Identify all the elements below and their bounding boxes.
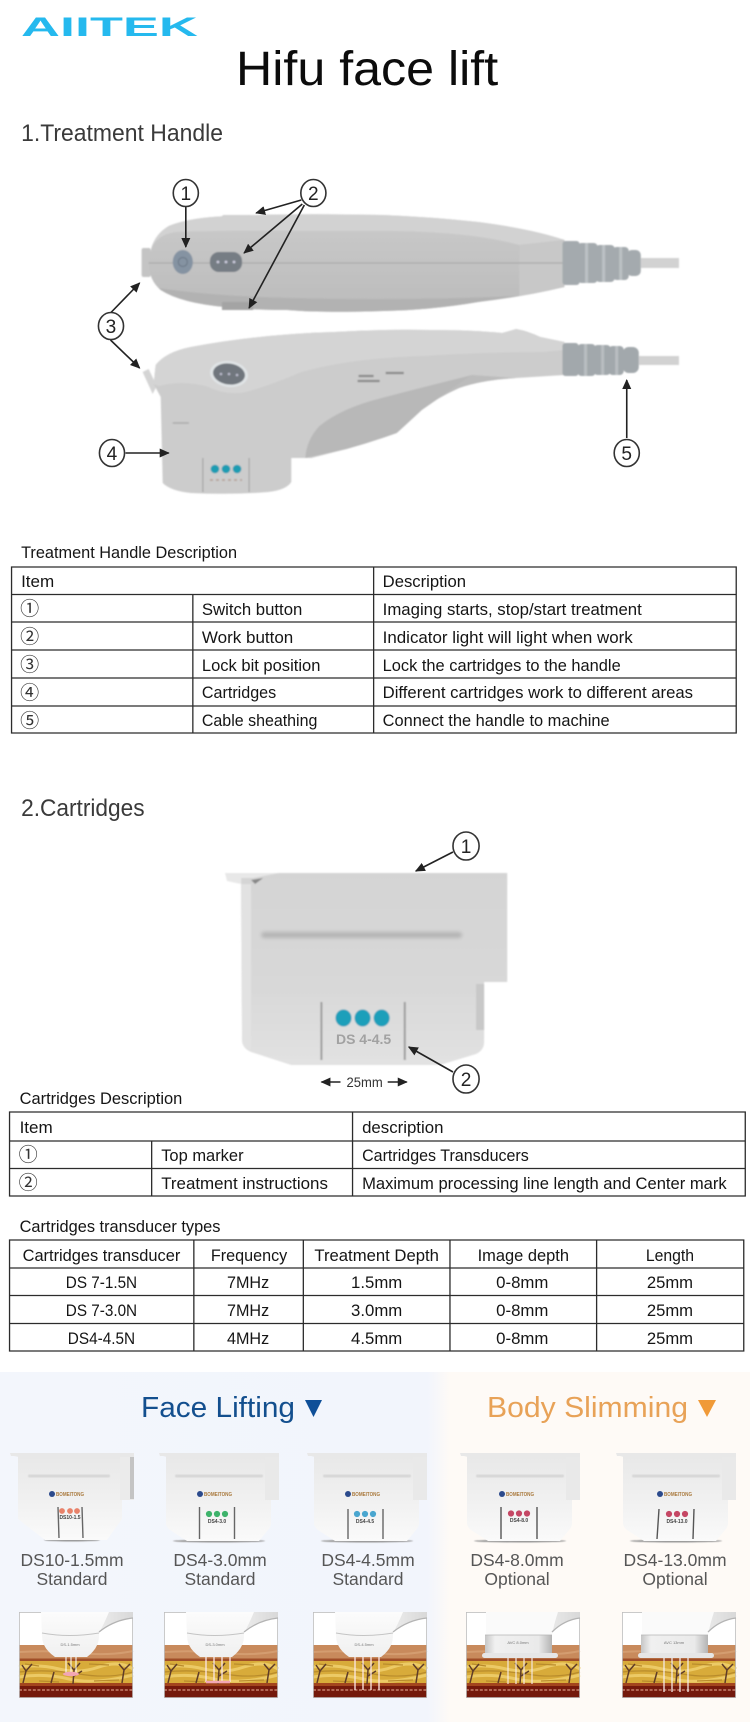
cartridge body (225, 873, 507, 1065)
table: treatment handle description: Description (383, 572, 466, 591)
callout number 4 (99, 440, 125, 466)
table: cartridges transducer types: Image depth (478, 1246, 569, 1265)
cartridge: DS4-8.0mm (460, 1453, 580, 1542)
table: cartridges description: Treatment instructions (161, 1174, 328, 1193)
table: cartridges transducer types: DS4-4.5N (68, 1329, 135, 1348)
diagram: DS4-3.0mm depth (164, 1612, 278, 1698)
table: cartridges transducer types: 1.5mm (351, 1273, 402, 1292)
caption: cartridges transducer types: Cartridges transducer types (20, 1217, 220, 1236)
diagram: DS4-8.0mm depth (466, 1612, 580, 1698)
table: treatment handle description: ② (20, 622, 39, 649)
diagram: DS4-8.0mm depth: AVC 8.0mm (507, 1640, 529, 1645)
cartridge marking: DS 4-4.5 (336, 1031, 391, 1047)
heading: body slimming: Body Slimming (487, 1392, 688, 1424)
title: Hifu face lift (236, 42, 499, 96)
table: cartridges description: description (362, 1118, 443, 1137)
diagram: DS4-13.0mm depth: AVC 13mm (664, 1640, 685, 1645)
cartridge: DS4-13.0mm: BOMEITONG (664, 1492, 692, 1498)
callout arrows (409, 852, 453, 1072)
table: treatment handle description: Item (21, 572, 54, 591)
illustration: cartridge with callouts (225, 832, 507, 1093)
table: cartridges transducer types: 25mm (647, 1301, 693, 1320)
label: DS4-8.0mm optional (470, 1550, 564, 1589)
callout number 5: 5 (621, 444, 632, 465)
cartridge: DS10-1.5mm: DS10-1.5 (59, 1515, 81, 1521)
label: DS10-1.5mm standard: DS10-1.5mm (20, 1550, 124, 1570)
heading: 1. Treatment Handle: 1.Treatment Handle (21, 120, 223, 147)
cartridge: DS4-13.0mm (616, 1453, 736, 1542)
diagram: DS10-1.5mm depth: DS-1.5mm (60, 1642, 80, 1647)
table: cartridges transducer types: 4.5mm (351, 1329, 402, 1348)
label: DS4-13.0mm optional: Optional (642, 1569, 708, 1589)
table: treatment handle description: Indicator light will light when work (383, 628, 634, 647)
diagram: DS4-13.0mm depth (622, 1612, 736, 1698)
table: treatment handle description: ① (20, 594, 39, 621)
callout number 2: 2 (308, 184, 319, 205)
table: cartridges description (10, 1112, 745, 1196)
table: cartridges transducer types: Length (646, 1246, 694, 1265)
table: treatment handle description: ③ (20, 650, 39, 677)
cartridge: DS4-3.0mm (159, 1453, 279, 1542)
diagram: DS4-4.5mm depth: DS-4.5mm (354, 1642, 374, 1647)
table: cartridges transducer types: 25mm (647, 1273, 693, 1292)
cartridge: DS4-8.0mm: BOMEITONG (506, 1492, 534, 1498)
callout number 1 (453, 832, 479, 860)
label: DS4-4.5mm standard: DS4-4.5mm (321, 1550, 415, 1570)
illustration: treatment handle with callouts (98, 180, 679, 494)
table: cartridges description: Top marker (161, 1146, 244, 1165)
handle: side view (143, 329, 679, 494)
table: cartridges transducer types: 4MHz (227, 1329, 269, 1348)
callout number 2 (453, 1065, 479, 1093)
brand logo: AIITEK (21, 12, 199, 42)
callout number 3: 3 (106, 317, 116, 338)
table: cartridges transducer types: 0-8mm (496, 1329, 548, 1348)
diagram: DS4-4.5mm depth (313, 1612, 427, 1698)
label: DS4-4.5mm standard: Standard (332, 1569, 404, 1589)
cartridge: DS10-1.5mm: BOMEITONG (56, 1492, 84, 1498)
cartridge: DS4-3.0mm: DS4-3.0 (208, 1519, 226, 1525)
dimension: 25mm: 25mm (347, 1074, 383, 1090)
label: DS4-4.5mm standard (321, 1550, 415, 1589)
upper page content (10, 12, 745, 1351)
callout number 2: 2 (461, 1070, 471, 1091)
callout number 2 (301, 180, 326, 206)
table: treatment handle description: ④ (20, 678, 39, 705)
table: cartridges transducer types: DS 7-1.5N (66, 1273, 137, 1292)
table: cartridges transducer types: Frequency (211, 1246, 288, 1265)
diagram: DS4-3.0mm depth: DS-3.0mm (205, 1642, 225, 1647)
table: cartridges transducer types: Treatment Depth (314, 1246, 439, 1265)
callout number 3 (98, 312, 124, 340)
label: DS10-1.5mm standard (20, 1550, 124, 1589)
table: cartridges description: Cartridges Transducers (362, 1146, 529, 1165)
cartridge: DS4-4.5mm: BOMEITONG (352, 1492, 380, 1498)
callout number 1: 1 (181, 184, 191, 205)
label: DS4-8.0mm optional: Optional (484, 1569, 550, 1589)
cartridge: DS4-3.0mm: BOMEITONG (204, 1492, 232, 1498)
cartridge: DS4-8.0mm: DS4-8.0 (510, 1518, 528, 1524)
caption: cartridges description: Cartridges Description (20, 1089, 182, 1108)
table: treatment handle description: Connect the handle to machine (383, 711, 610, 730)
table: cartridges transducer types: 0-8mm (496, 1301, 548, 1320)
panel: cartridge comparison (0, 1372, 750, 1722)
table: treatment handle description: Imaging starts, stop/start treatment (383, 600, 642, 619)
table: cartridges transducer types: 0-8mm (496, 1273, 548, 1292)
callout number 4: 4 (107, 444, 118, 465)
callout arrows (110, 200, 627, 453)
table: cartridges description: Maximum processing line length and Center mark (362, 1174, 727, 1193)
table: treatment handle description: Lock the cartridges to the handle (383, 656, 621, 675)
table: cartridges transducer types: 25mm (647, 1329, 693, 1348)
callout number 1 (173, 180, 198, 206)
label: DS4-13.0mm optional (623, 1550, 727, 1589)
table: cartridges transducer types: 7MHz (227, 1301, 269, 1320)
callout number 1: 1 (461, 837, 471, 858)
table: treatment handle description: Work button (202, 628, 293, 647)
heading: face lifting: Face Lifting (141, 1392, 295, 1424)
caption: treatment handle description: Treatment Handle Description (21, 543, 237, 562)
label: DS4-3.0mm standard: DS4-3.0mm (173, 1550, 267, 1570)
cartridge: DS4-4.5mm: DS4-4.5 (356, 1519, 374, 1525)
table: cartridges transducer types: 7MHz (227, 1273, 269, 1292)
label: DS10-1.5mm standard: Standard (36, 1569, 108, 1589)
cartridge: DS10-1.5mm (10, 1453, 134, 1542)
label: DS4-3.0mm standard: Standard (184, 1569, 256, 1589)
table: cartridges description: Item (20, 1118, 53, 1137)
table: treatment handle description: Cartridges (202, 683, 276, 702)
table: cartridges transducer types: DS 7-3.0N (66, 1301, 137, 1320)
diagram: DS10-1.5mm depth (19, 1612, 133, 1698)
label: DS4-8.0mm optional: DS4-8.0mm (470, 1550, 564, 1570)
dimension: 25mm (321, 1074, 407, 1090)
table: cartridges transducer types: 3.0mm (351, 1301, 402, 1320)
label: DS4-13.0mm optional: DS4-13.0mm (623, 1550, 727, 1570)
table: cartridges description: ① (19, 1140, 38, 1167)
cartridge: DS4-13.0mm: DS4-13.0 (666, 1519, 688, 1525)
table: cartridges description: ② (19, 1168, 38, 1195)
heading: 2. Cartridges: 2.Cartridges (21, 795, 145, 822)
table: treatment handle description (12, 567, 736, 733)
table: cartridges transducer types (10, 1240, 744, 1351)
table: treatment handle description: Lock bit position (202, 656, 320, 675)
cartridge: DS4-4.5mm (307, 1453, 427, 1542)
table: cartridges transducer types: Cartridges transducer (23, 1246, 181, 1265)
table: treatment handle description: Cable sheathing (202, 711, 317, 730)
label: DS4-3.0mm standard (173, 1550, 267, 1589)
table: treatment handle description: Switch button (202, 600, 302, 619)
handle: top view (142, 214, 679, 312)
callout number 5 (614, 440, 639, 466)
table: treatment handle description: ⑤ (20, 706, 39, 733)
table: treatment handle description: Different cartridges work to different areas (383, 683, 693, 702)
